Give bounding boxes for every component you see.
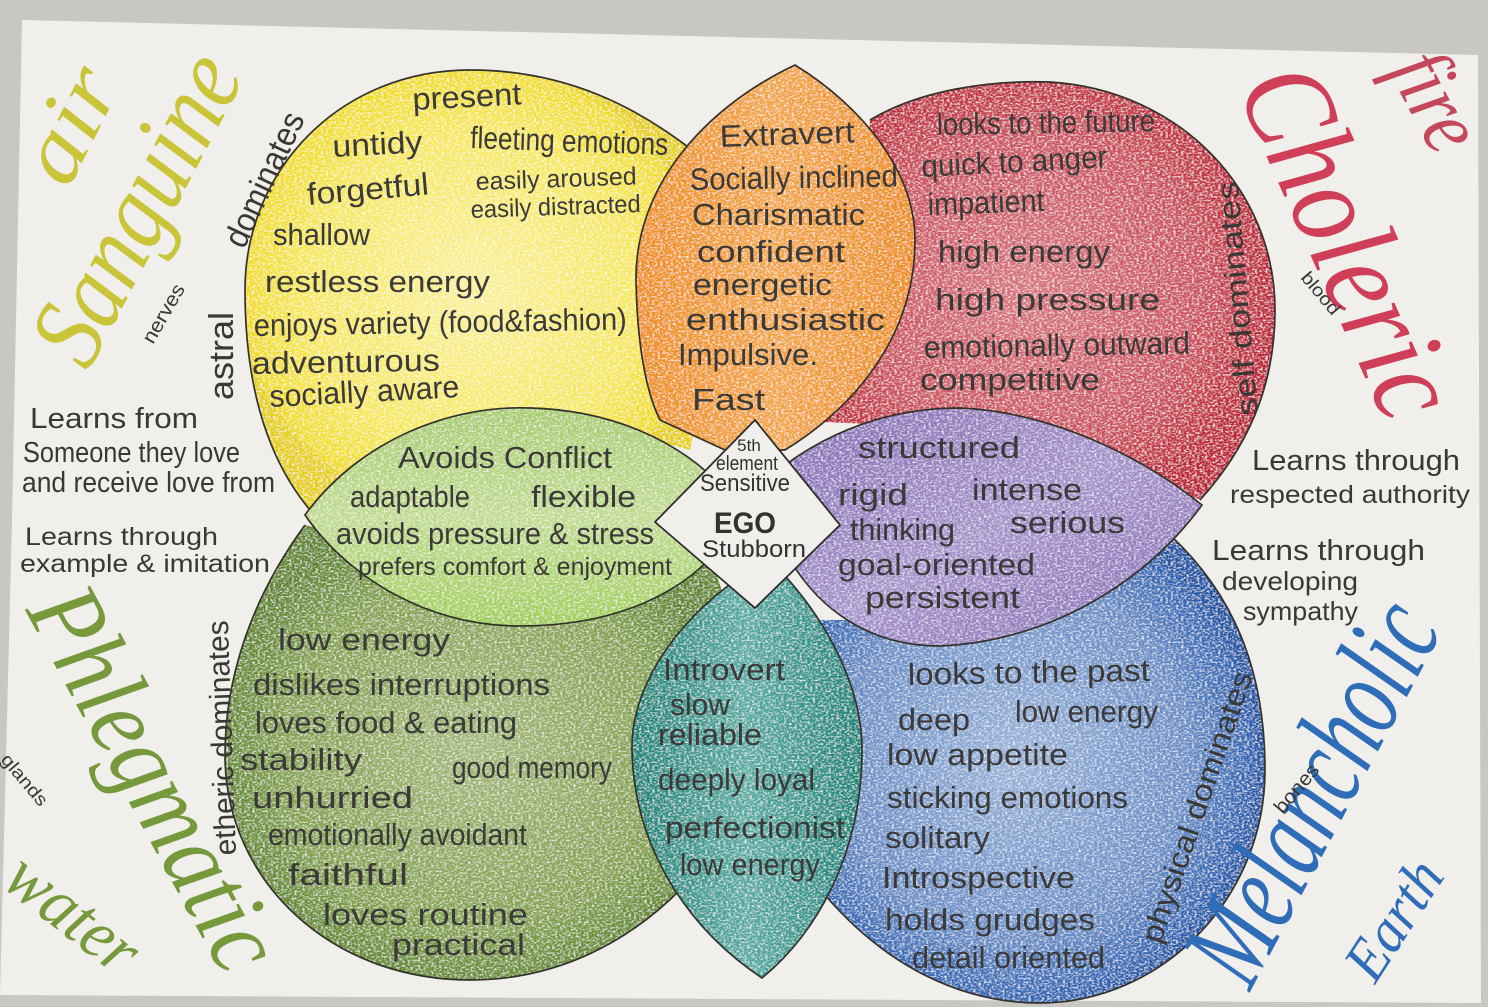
note: phlegmatic learning (20, 523, 270, 578)
text: sanguine traits: untidy (332, 124, 424, 164)
circle: phlegmatic green (225, 525, 725, 980)
text: overlap choleric-melancholic: persistent (865, 580, 1020, 615)
text: introvert traits: Introvert (663, 652, 785, 687)
text: phlegmatic traits: low energy (278, 622, 451, 657)
text: ego diamond: Sensitive (700, 470, 790, 497)
note: sanguine learning (22, 403, 275, 499)
text: sanguine traits: enjoys variety (food&fashion) (254, 301, 627, 343)
text: extravert traits: confident (697, 234, 845, 269)
note: sanguine learning: and receive love from (22, 467, 275, 499)
text: melancholic traits: Introspective (882, 860, 1075, 895)
text: extravert traits (678, 114, 898, 417)
text: sanguine traits: socially aware (269, 369, 460, 414)
text: phlegmatic traits: faithful (288, 857, 408, 892)
diamond: ego centre (655, 420, 840, 608)
text: melancholic traits: low energy (1015, 694, 1158, 729)
text: overlap sanguine-phlegmatic: Avoids Conflict (398, 440, 612, 475)
text: ego diamond: EGO (714, 507, 776, 540)
text: overlap sanguine-phlegmatic: prefers comfort & enjoyment (358, 553, 672, 581)
note: phlegmatic learning: Learns through (25, 523, 218, 551)
text: phlegmatic traits: good memory (452, 750, 612, 785)
title: air: air (0, 48, 140, 199)
text: extravert traits: Impulsive. (678, 337, 818, 372)
text: sanguine traits: present (412, 76, 523, 117)
text: choleric traits: high pressure (935, 282, 1160, 317)
label: physical dominates: physical dominates (1135, 667, 1259, 947)
text: overlap choleric-melancholic (838, 430, 1125, 615)
text: melancholic traits (882, 653, 1158, 975)
text: phlegmatic traits: loves food & eating (255, 705, 517, 740)
text: sanguine traits: shallow (273, 217, 371, 252)
text: melancholic traits: detail oriented (912, 940, 1105, 975)
text: phlegmatic traits: practical (392, 927, 525, 962)
circle: melancholic blue (810, 535, 1265, 1003)
text: introvert traits: low energy (680, 847, 820, 882)
note: melancholic learning: sympathy (1243, 596, 1358, 626)
text: overlap sanguine-phlegmatic: avoids pressure & stress (336, 516, 654, 551)
lens: purple overlap (785, 408, 1202, 646)
text: overlap sanguine-phlegmatic: adaptable (350, 479, 470, 514)
text: overlap sanguine-phlegmatic: flexible (531, 479, 636, 514)
text: choleric traits: quick to anger (921, 139, 1108, 184)
note: sanguine learning: Learns from (30, 403, 198, 435)
note: melancholic learning (1212, 535, 1425, 626)
text: overlap choleric-melancholic: thinking (850, 512, 955, 547)
text: choleric traits: high energy (938, 234, 1111, 269)
circle: choleric red (825, 82, 1275, 500)
text: introvert traits: deeply loyal (658, 762, 815, 797)
text: overlap sanguine-phlegmatic (336, 440, 672, 581)
text: choleric traits: looks to the future (937, 103, 1155, 142)
text: choleric traits (920, 103, 1190, 397)
text: choleric traits: competitive (920, 362, 1100, 397)
text: overlap choleric-melancholic: goal-oriented (838, 547, 1035, 582)
label: nerves: nerves (138, 280, 190, 348)
text: overlap choleric-melancholic: rigid (838, 477, 908, 512)
label: blood: blood (1297, 268, 1344, 319)
text: extravert traits: Charismatic (692, 197, 865, 232)
text: sanguine traits: restless energy (265, 264, 491, 299)
label: etheric dominates: etheric dominates (202, 620, 243, 856)
text: introvert traits: reliable (658, 717, 762, 752)
lens: extravert orange (636, 65, 915, 450)
text: overlap choleric-melancholic: intense (972, 472, 1082, 507)
text: ego diamond: 5th (737, 436, 761, 455)
note: melancholic learning: developing (1222, 566, 1358, 596)
text: extravert traits: Extravert (719, 114, 856, 154)
text: phlegmatic traits: unhurried (252, 780, 413, 815)
text: ego diamond: Stubborn (702, 536, 806, 563)
label: self dominates: self dominates (1212, 180, 1265, 417)
text: overlap choleric-melancholic: structured (858, 430, 1020, 465)
note: melancholic learning: Learns through (1212, 535, 1425, 567)
text: sanguine traits: adventurous (252, 343, 440, 381)
text: extravert traits: Socially inclined (690, 158, 898, 197)
text: extravert traits: energetic (693, 267, 832, 302)
text: overlap choleric-melancholic: serious (1010, 505, 1125, 540)
text: melancholic traits: sticking emotions (887, 780, 1128, 815)
text: melancholic traits: low appetite (887, 737, 1068, 772)
text: phlegmatic traits: dislikes interruptions (253, 667, 550, 702)
text: introvert traits: slow (670, 687, 731, 722)
text: melancholic traits: deep (898, 702, 970, 737)
text: sanguine traits (252, 76, 669, 414)
label: astral: astral (203, 312, 241, 400)
text: phlegmatic traits: emotionally avoidant (268, 817, 527, 852)
text: sanguine traits: easily aroused (475, 162, 637, 196)
text: phlegmatic traits: loves routine (323, 897, 528, 932)
text: sanguine traits: easily distracted (470, 190, 641, 224)
text: choleric traits: impatient (927, 183, 1046, 222)
text: ego diamond (700, 436, 806, 563)
note: choleric learning (1230, 445, 1471, 509)
text: sanguine traits: fleeting emotions (470, 120, 669, 162)
title: Earth: Earth (1330, 847, 1457, 993)
label: dominates (astral): dominates (217, 106, 313, 253)
text: ego diamond: element (716, 453, 778, 475)
note: choleric learning: respected authority (1230, 481, 1471, 509)
text: extravert traits: enthusiastic (686, 302, 885, 337)
label: bones: bones (1270, 760, 1324, 818)
text: phlegmatic traits (240, 622, 612, 962)
text: introvert traits (658, 652, 845, 882)
text: introvert traits: perfectionist (665, 810, 845, 845)
text: melancholic traits: looks to the past (908, 653, 1150, 692)
text: melancholic traits: solitary (885, 820, 991, 855)
lens: light green overlap (305, 408, 725, 626)
note: sanguine learning: Someone they love (23, 437, 240, 469)
text: sanguine traits: forgetful (306, 166, 430, 212)
circle: sanguine yellow (245, 70, 700, 510)
text: melancholic traits: holds grudges (885, 902, 1095, 937)
text: extravert traits: Fast (692, 382, 765, 417)
lens: introvert teal (632, 560, 862, 978)
text: phlegmatic traits: stability (240, 742, 363, 777)
text: choleric traits: emotionally outward (924, 325, 1190, 365)
note: choleric learning: Learns through (1252, 445, 1460, 477)
note: phlegmatic learning: example & imitation (20, 550, 270, 578)
